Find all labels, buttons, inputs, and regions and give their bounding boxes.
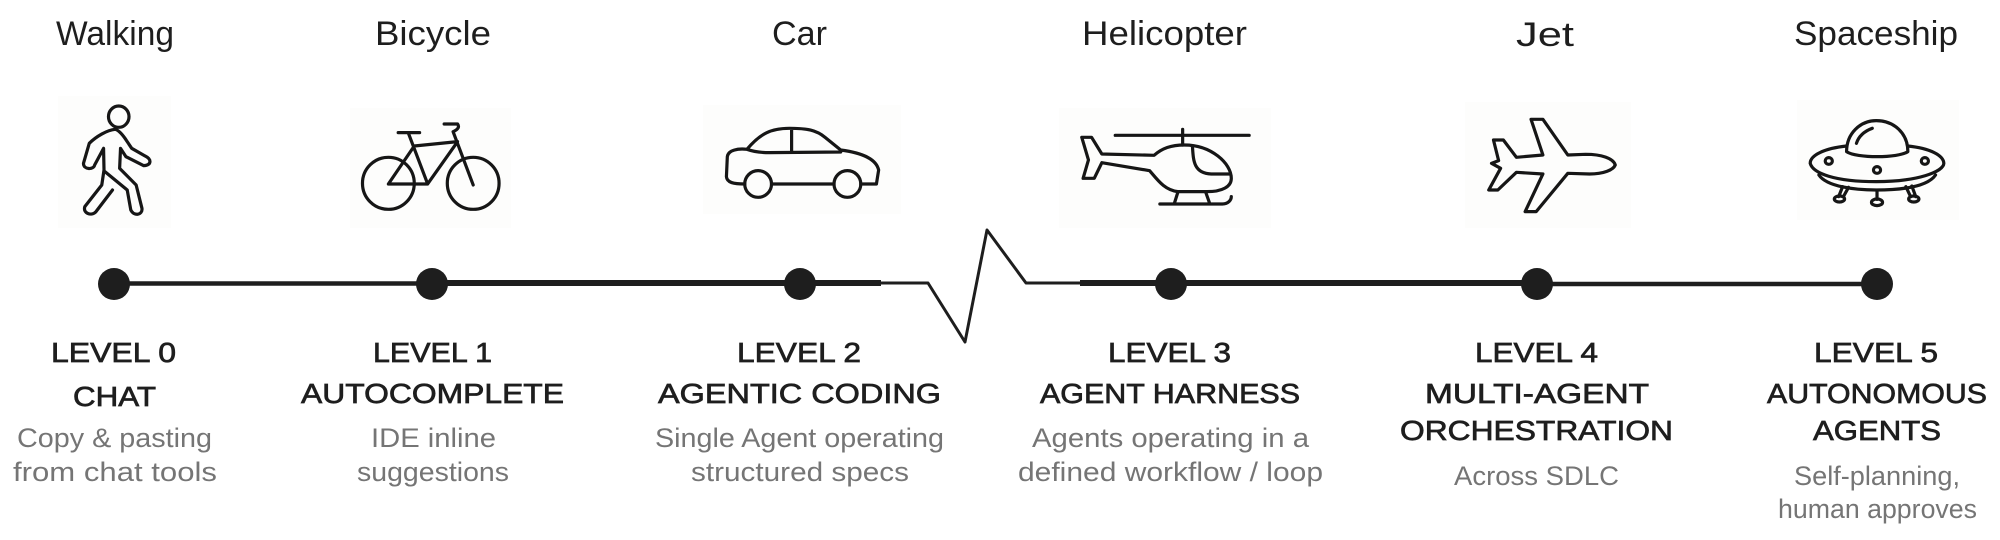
icon: bicycle [350,108,511,228]
label: Multi-Agent Orchestration [1400,378,1673,446]
dot: level 2 [784,268,816,300]
label: Level 4: LEVEL 4 [1475,337,1598,368]
dot: level 0 [98,268,130,300]
panel: level 3 helicopter [1018,15,1323,487]
label: Agentic Coding: AGENTIC CODING [658,378,941,409]
heading: Helicopter: Helicopter [1082,15,1247,53]
description: level 3: defined workflow / loop [1018,457,1323,487]
description: level 2: Single Agent operating [655,423,944,453]
panel: level 1 bicycle [301,15,564,487]
description: level 5 [1778,461,1977,524]
dot: level 3 [1155,268,1187,300]
label: Multi-Agent Orchestration: MULTI-AGENT [1425,378,1649,409]
description: level 5: Self-planning, [1794,461,1960,491]
description: level 5: human approves [1778,494,1977,524]
description: level 3: Agents operating in a [1032,423,1310,453]
icon: car [703,105,901,214]
icon: jet [1465,102,1631,228]
label: Agent Harness: AGENT HARNESS [1040,378,1300,409]
label: Autocomplete: AUTOCOMPLETE [301,378,564,409]
description: level 1: suggestions [357,457,509,487]
heading: Car: Car [772,15,827,53]
heading: Bicycle: Bicycle [375,15,491,53]
label: Autonomous Agents: AGENTS [1813,415,1941,446]
panel: level 4 jet [1400,16,1673,491]
description: level 2: structured specs [691,457,909,487]
description: level 1: IDE inline [371,423,496,453]
description: level 0: from chat tools [13,457,217,487]
label: Level 1: LEVEL 1 [373,337,492,368]
label: Level 5: LEVEL 5 [1814,337,1938,368]
label: Multi-Agent Orchestration: ORCHESTRATION [1400,415,1673,446]
icon: spaceship [1797,100,1959,220]
description: level 4: Across SDLC [1454,461,1619,491]
icon: person walking [58,96,171,228]
timeline line with break [114,230,1877,342]
icon: helicopter [1059,108,1271,228]
panel: level 5 spaceship [1767,15,1987,524]
heading: Jet: Jet [1516,16,1575,54]
label: Level 3: LEVEL 3 [1108,337,1231,368]
dot: level 5 [1861,268,1893,300]
dot: level 1 [416,268,448,300]
description: level 0 [13,423,217,487]
label: Autonomous Agents [1767,378,1987,446]
label: Level 2: LEVEL 2 [737,337,861,368]
heading: Spaceship: Spaceship [1794,15,1958,53]
panel: level 0 walking [13,15,217,487]
description: level 2 [655,423,944,487]
label: Chat: CHAT [73,381,156,412]
dot: level 4 [1521,268,1553,300]
panel: timeline [98,230,1893,342]
label: Level 0: LEVEL 0 [51,337,176,368]
panel: level 2 car [655,15,944,487]
label: Autonomous Agents: AUTONOMOUS [1767,378,1987,409]
heading: Walking: Walking [56,15,174,53]
description: level 0: Copy & pasting [17,423,212,453]
description: level 1 [357,423,509,487]
description: level 3 [1018,423,1323,487]
